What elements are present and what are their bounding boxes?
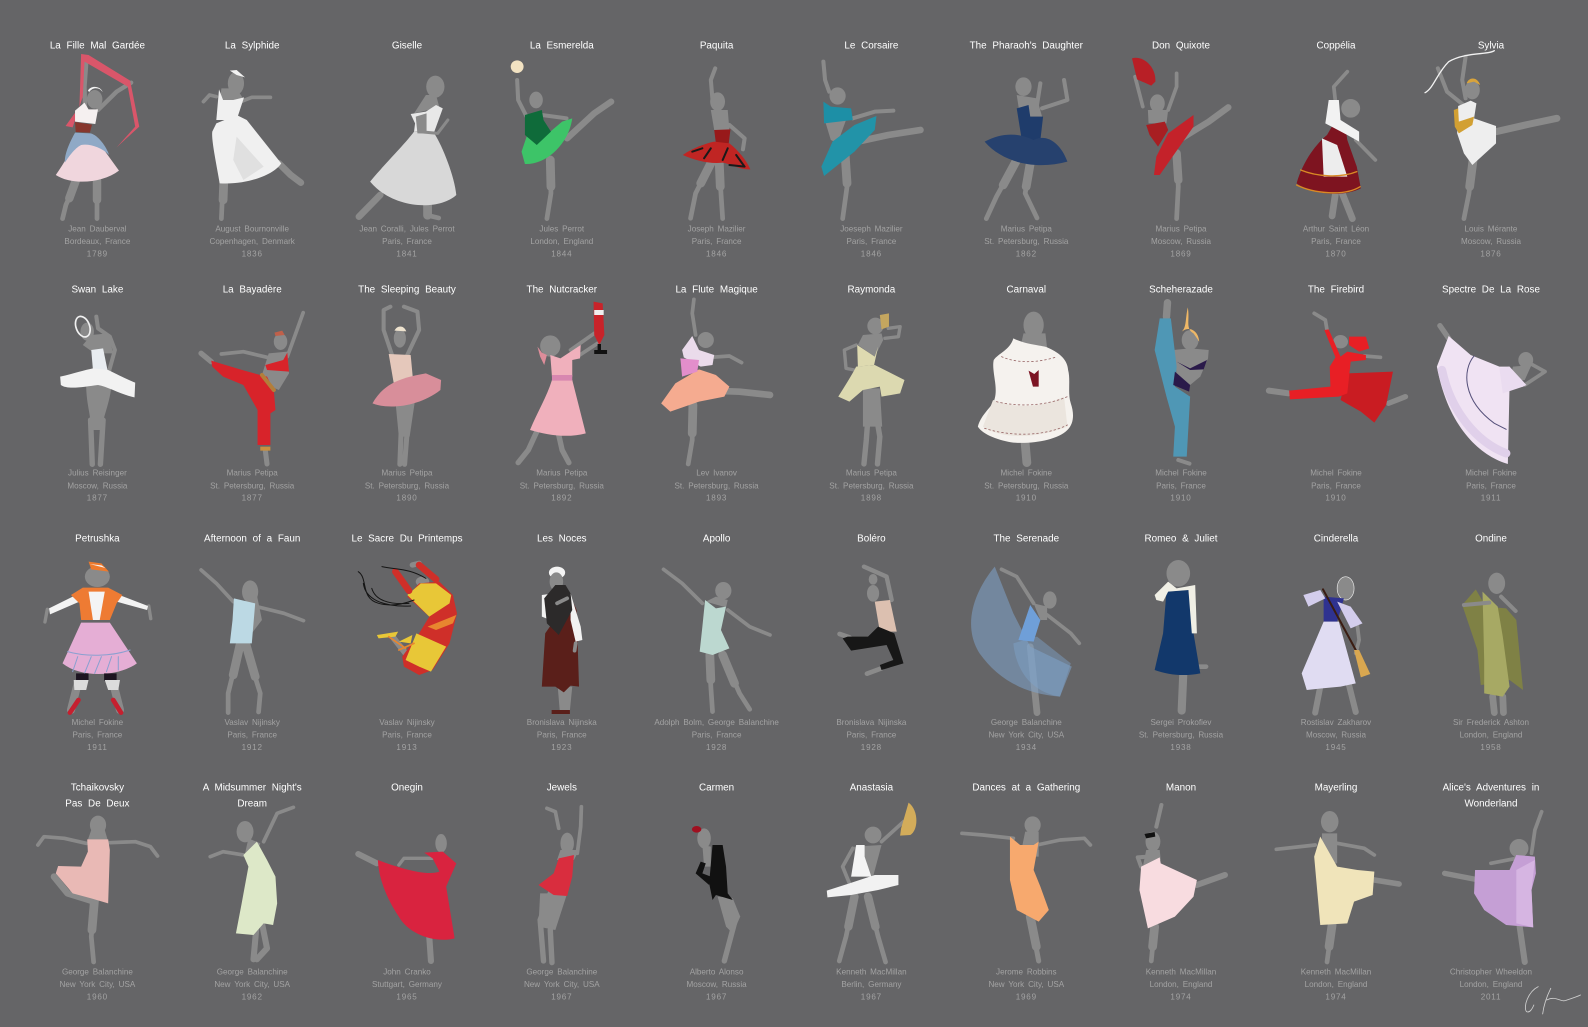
credits: George Balanchine [62,968,133,976]
dancer: white tutu with gold fan [827,803,916,962]
dancer: pink dress holding nutcracker doll [518,302,607,463]
panel: La Esmerelda [511,40,611,258]
dancer: long grey-white tutu [359,76,456,218]
title: Le Corsaire [844,40,899,52]
title [65,783,130,810]
credits: Bordeaux, France [64,237,131,246]
credits: 1958 [1480,743,1502,752]
title: Dances at a Gathering [972,783,1080,794]
panel: La Sylphide [203,40,301,258]
dancer: pink tutu [372,307,441,464]
panel: Carmen [687,783,747,1002]
title: Dream [237,799,267,810]
title: Carnaval [1007,284,1046,296]
title: The Firebird [1308,284,1364,296]
credits [1310,468,1362,503]
panel: The Firebird [1269,284,1405,503]
credits: 1911 [1481,494,1501,503]
panel: Le Sacre Du Printemps [351,534,463,752]
credits: 1938 [1170,743,1192,752]
title: Giselle [392,40,423,52]
title: Pas De Deux [65,799,130,810]
credits: St. Petersburg, Russia [210,481,295,490]
dancer: peach skirt [661,299,770,464]
dancer: male in black trousers [840,567,903,674]
credits [64,224,131,258]
panel: The Pharaoh's Daughter [970,40,1084,258]
dancer: white ruffled gown [978,312,1073,463]
credits: Jerome Robbins [996,968,1057,976]
credits [1453,718,1529,752]
title: La Bayadère [223,284,282,296]
credits: 1877 [87,494,108,503]
panel: A Midsummer Night's Dream [203,783,302,1002]
panel: Tchaikovsky Pas De Deux [38,783,158,1002]
title: La Esmerelda [530,40,594,52]
credits [1146,968,1216,1002]
credits [654,718,779,752]
credits: Paris, France [692,730,742,739]
panel: Romeo & Juliet [1139,534,1224,752]
credits: 1836 [242,249,263,258]
panel: Anastasia [827,783,916,1002]
title: Le Sacre Du Printemps [351,534,463,544]
panel: Onegin [358,783,456,1002]
credits: Lev Ivanov [696,468,738,478]
credits [687,968,747,1002]
title: La Sylphide [225,40,280,52]
credits [524,968,600,1002]
title: Jewels [547,783,577,794]
credits: 1877 [242,494,263,503]
title: Scheherazade [1149,284,1213,296]
credits: 1890 [396,494,418,503]
credits [1465,468,1517,503]
credits: Paris, France [847,730,897,739]
credits: 1869 [1170,249,1192,258]
credits: 1928 [861,743,882,752]
credits: St. Petersburg, Russia [984,481,1069,490]
credits [379,718,436,752]
panel: Le Corsaire [821,40,920,258]
credits: 1898 [861,494,882,503]
panel: Alice's Adventures in Wonderland [1443,783,1542,1002]
panel: Scheherazade [1149,284,1213,503]
credits: Sir Frederick Ashton [1453,718,1529,727]
credits: 1841 [396,249,418,258]
panel: La Bayadère [201,284,303,503]
title: Onegin [391,783,423,794]
credits [836,968,907,1002]
credits: New York City, USA [988,730,1065,739]
credits: 1967 [551,992,572,1002]
credits: New York City, USA [524,980,600,989]
credits: Bronislava Nijinska [836,718,907,727]
dancer: lilac rags and broom [1302,577,1370,713]
credits: 1923 [551,743,572,752]
credits: Stuttgart, Germany [372,980,443,989]
title: Alice's Adventures in [1443,783,1539,794]
credits [372,968,443,1002]
credits: 1910 [1016,494,1037,503]
dancer: pale green leotard [664,569,770,712]
credits: Kenneth MacMillan [1301,968,1371,976]
dancer: pink ribbon costume [56,54,139,219]
credits: Bronislava Nijinska [527,718,597,727]
credits: 1928 [706,743,727,752]
credits: Kenneth MacMillan [1146,968,1216,976]
credits [988,718,1065,752]
credits [1301,718,1372,752]
dancer: pale green dress [210,807,293,959]
credits: Paris, France [1466,481,1516,490]
dancer: red tutu with fan [1132,58,1228,219]
credits [988,968,1065,1002]
panel: Manon [1138,783,1225,1002]
credits: St. Petersburg, Russia [829,481,914,490]
credits: Jean Coralli, Jules Perrot [359,224,455,233]
title: The Sleeping Beauty [358,284,456,296]
credits: Joseph Mazilier [688,224,746,233]
title: La Fille Mal Gardée [50,40,145,52]
dancer: pale pink dress [1138,805,1225,961]
title: Petrushka [75,534,120,544]
credits: George Balanchine [217,968,288,976]
title: Paquita [700,40,734,52]
credits: London, England [1305,980,1367,989]
credits: Paris, France [382,730,432,739]
credits [530,224,593,258]
title: Mayerling [1315,783,1357,794]
title: Boléro [857,534,886,544]
credits: Paris, France [537,730,587,739]
credits: Christopher Wheeldon [1450,968,1532,976]
dancer: translucent blue skirt [971,567,1079,713]
credits: 1846 [706,249,727,258]
dancer: purple dress [1445,812,1542,962]
dancer: black costume with red flower [692,826,740,961]
credits [210,224,296,258]
credits: Michel Fokine [1465,468,1517,478]
panel: The Serenade [971,534,1079,752]
credits: George Balanchine [526,968,598,976]
credits: 1967 [861,992,882,1002]
credits: London, England [1460,730,1522,739]
credits: 1945 [1325,743,1347,752]
credits: 1912 [242,743,263,752]
panel: Boléro [836,534,907,752]
credits [527,718,597,752]
dancer: white romantic dress [203,70,301,219]
credits: 1870 [1325,249,1347,258]
panel: Apollo [654,534,779,752]
credits: Michel Fokine [1001,468,1053,478]
dancer: blush pink dress [38,816,158,962]
credits [688,224,746,258]
title: Don Quixote [1152,40,1210,52]
dancer: orange jacket and pink skirt [45,562,151,713]
credits: 1965 [396,992,418,1002]
credits: Moscow, Russia [1151,237,1212,246]
dancer: green tutu with flower [511,60,611,219]
credits: Jules Perrot [539,224,585,233]
credits: Marius Petipa [846,468,897,478]
panel: The Nutcracker [518,284,607,503]
credits: Michel Fokine [1310,468,1362,478]
title: Swan Lake [71,284,124,296]
credits [675,468,759,503]
dancer: red feathered leap [1269,313,1405,423]
panel: La Flute Magique [661,284,770,503]
panel: Afternoon of a Faun [201,534,304,752]
panel: The Sleeping Beauty [358,284,456,503]
credits: Vaslav Nijinsky [224,718,281,727]
credits: Moscow, Russia [67,481,128,490]
title: Coppélia [1317,40,1356,52]
dancer: burgundy dress with apron [1297,72,1375,219]
credits: London, England [1150,980,1212,989]
credits [72,718,124,752]
credits: Kenneth MacMillan [836,968,907,976]
credits: George Balanchine [991,718,1062,727]
credits [359,224,455,258]
credits: 1862 [1016,249,1037,258]
credits: St. Petersburg, Russia [520,481,604,490]
credits: Moscow, Russia [1306,730,1367,739]
credits: Marius Petipa [227,468,278,478]
title: Anastasia [850,783,894,794]
credits [224,718,281,752]
credits: 1934 [1016,743,1037,752]
title: Cinderella [1314,534,1359,544]
credits: New York City, USA [60,980,136,989]
panel: Don Quixote [1132,40,1228,258]
credits: St. Petersburg, Russia [984,237,1069,246]
panel: Les Noces [527,534,597,752]
dancer: teal harem costume [821,62,920,219]
credits: John Cranko [383,968,431,976]
credits: 1846 [861,249,882,258]
dancer: white swan tutu [60,314,135,464]
credits: St. Petersburg, Russia [675,481,759,490]
title: Raymonda [848,284,896,296]
panel: Coppélia [1297,40,1375,258]
credits [1151,224,1212,258]
credits: Copenhagen, Denmark [210,237,296,246]
title: Manon [1166,783,1196,794]
credits [520,468,604,503]
credits: 1910 [1325,494,1347,503]
credits: 1913 [396,743,418,752]
credits: 1974 [1170,992,1192,1002]
credits [60,968,136,1002]
dancer: pale gold tutu [838,313,905,464]
credits [840,224,903,258]
credits: Vaslav Nijinsky [379,718,436,727]
panel: La Fille Mal Gardée [50,40,145,258]
credits: Alberto Alonso [690,968,744,976]
title: Wonderland [1464,799,1518,810]
panel: Sylvia [1425,40,1557,258]
credits: St. Petersburg, Russia [1139,730,1224,739]
credits: 1962 [242,992,263,1002]
credits: Paris, France [382,237,432,246]
credits: 1969 [1016,992,1037,1002]
credits: London, England [530,237,593,246]
dancer: navy dress with white scarf [1155,560,1206,711]
title: La Flute Magique [675,284,758,296]
credits: Paris, France [1156,481,1206,490]
panel: Jewels [524,783,600,1002]
credits: 2011 [1481,992,1501,1002]
credits: 1910 [1170,494,1192,503]
credits: August Bournonville [215,224,289,233]
panel: Carnaval [978,284,1073,503]
dancer: cream dress [1276,811,1399,962]
title: A Midsummer Night's [203,783,302,794]
credits: 1876 [1480,249,1502,258]
panel: Giselle [359,40,456,258]
dancer: crimson flowing dress [358,834,456,961]
title: Tchaikovsky [71,783,124,794]
credits [829,468,914,503]
dancer: red harem trousers [201,313,303,464]
credits [984,468,1069,503]
credits: Moscow, Russia [687,980,747,989]
credits [214,968,291,1002]
title: Carmen [699,783,734,794]
dancer: orange dress [962,816,1090,961]
credits: 1893 [706,494,727,503]
credits [1461,224,1522,258]
dancer: navy tutu [985,77,1067,219]
credits: 1974 [1325,992,1347,1002]
credits: 1960 [87,992,108,1002]
credits [1303,224,1369,258]
credits: Rostislav Zakharov [1301,718,1372,727]
credits: Berlin, Germany [841,980,902,989]
credits: Michel Fokine [72,718,124,727]
title [203,783,302,810]
title [1443,783,1539,810]
title: Apollo [703,534,731,544]
credits: Julius Reisinger [68,468,127,478]
title: The Nutcracker [527,284,598,296]
artist signature flourish [1525,987,1581,1014]
title: Sylvia [1478,40,1505,52]
panel: Paquita [683,40,750,258]
panel: Dances at a Gathering [962,783,1090,1002]
credits [984,224,1069,258]
dancer: ruby red leotard [538,807,581,963]
dancer: dark peasant dress [542,567,582,714]
credits: Adolph Bolm, George Balanchine [654,718,779,727]
title: The Serenade [994,534,1060,544]
title: Spectre De La Rose [1442,284,1540,296]
credits: New York City, USA [988,980,1065,989]
title: Ondine [1475,534,1507,544]
dancer: red and black tutu [683,68,750,219]
credits: Paris, France [1311,237,1361,246]
title: Romeo & Juliet [1145,534,1218,544]
credits: Paris, France [1311,481,1361,490]
credits [365,468,450,503]
credits: New York City, USA [214,980,291,989]
panel: Cinderella [1301,534,1372,752]
credits: 1911 [87,743,108,752]
panel: Ondine [1453,534,1529,752]
credits: Paris, France [847,237,897,246]
credits: Jean Dauberval [68,224,127,233]
credits [1139,718,1224,752]
panel: Petrushka [45,534,151,752]
credits: 1789 [87,249,108,258]
credits [67,468,128,503]
credits: Marius Petipa [1001,224,1052,233]
dancer: red and yellow jump [358,563,457,675]
panel: Raymonda [829,284,914,503]
credits: 1967 [706,992,727,1002]
credits: Marius Petipa [381,468,433,478]
panel: Mayerling [1276,783,1399,1002]
dancer: olive cape [1462,573,1523,713]
panel: Spectre De La Rose [1437,284,1545,503]
dancer: blue harem trousers, leg raised [1155,303,1209,464]
title: The Pharaoh's Daughter [970,40,1084,52]
credits: 1844 [551,249,572,258]
credits: St. Petersburg, Russia [365,481,450,490]
credits: Sergei Prokofiev [1151,718,1212,727]
credits: Paris, France [227,730,278,739]
title: Les Noces [537,534,587,544]
credits: London, England [1460,980,1522,989]
credits: Louis Mérante [1465,224,1518,233]
credits: Paris, France [692,237,742,246]
dancer: white tunic with bow [1425,51,1557,219]
credits [210,468,295,503]
credits: Moscow, Russia [1461,237,1522,246]
credits: Joeseph Mazilier [840,224,903,233]
credits: Michel Fokine [1155,468,1207,478]
dancer: pale blue tunic [201,570,304,713]
credits [1450,968,1532,1002]
credits: Marius Petipa [1155,224,1207,233]
credits: 1892 [551,494,572,503]
credits: Paris, France [73,730,123,739]
credits [1155,468,1207,503]
title: Afternoon of a Faun [204,534,300,544]
credits [836,718,907,752]
credits: Marius Petipa [536,468,588,478]
credits [1301,968,1371,1002]
credits: Arthur Saint Léon [1303,224,1369,233]
dancer: lilac flowing gown [1437,326,1545,464]
panel: Swan Lake [60,284,135,503]
